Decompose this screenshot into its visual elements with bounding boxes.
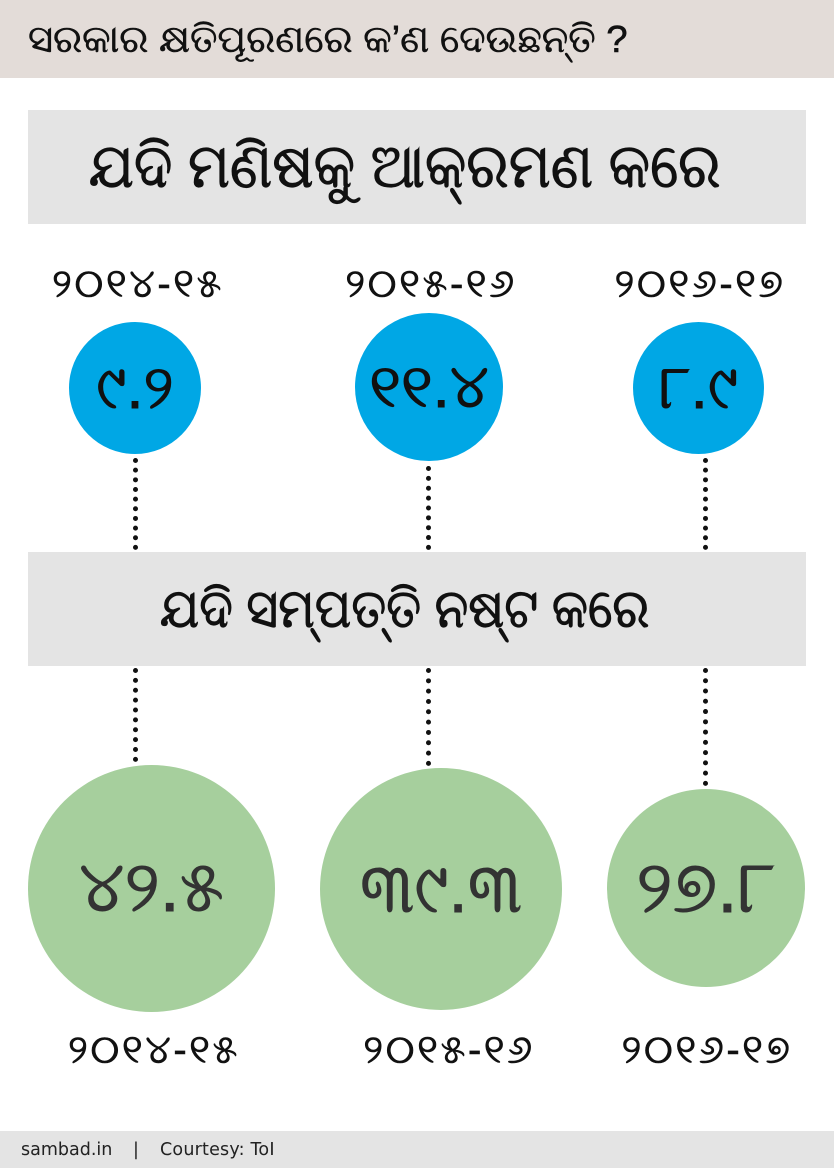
credit line: sambad.in: [21, 1140, 112, 1160]
year label 2014-15 top: ୨୦୧୪-୧୫: [52, 262, 224, 306]
green circle 27.8: [607, 789, 805, 987]
green circle 39.3: ୩୯.୩: [360, 850, 522, 926]
panel heading: if property is damaged: ଯଦି ସମ୍ପତ୍ତି ନଷ୍ଟ କରେ: [160, 579, 650, 639]
credit line: |: [133, 1140, 139, 1160]
green circle 42.5: ୪୨.୫: [79, 848, 224, 927]
year label 2015-16 bottom: ୨୦୧୫-୧୬: [363, 1028, 535, 1072]
footer band: [0, 1131, 834, 1168]
credit line: [21, 1140, 275, 1160]
year label 2016-17 bottom: ୨୦୧୬-୧୭: [622, 1028, 792, 1072]
blue circle 11.4: [355, 313, 503, 461]
blue circle 11.4: ୧୧.୪: [369, 352, 489, 420]
green circle 42.5: [28, 765, 275, 1012]
header band: [0, 0, 834, 78]
blue circle 9.2: ୯.୨: [96, 353, 174, 421]
year label 2016-17 top: ୨୦୧୬-୧୭: [614, 262, 785, 306]
credit line: Courtesy: ToI: [160, 1140, 275, 1160]
blue circle 8.9: ୮.୯: [659, 353, 738, 421]
year label 2014-15 bottom: ୨୦୧୪-୧୫: [68, 1028, 240, 1072]
year label 2015-16 top: ୨୦୧୫-୧୬: [345, 262, 517, 306]
blue circle 9.2: [69, 322, 201, 454]
panel heading: if humans are attacked: [28, 110, 806, 224]
panel heading: if humans are attacked: ଯଦି ମଣିଷକୁ ଆକ୍ରମଣ କରେ: [89, 132, 721, 201]
green circle 39.3: [320, 768, 562, 1010]
panel heading: if property is damaged: [28, 552, 806, 666]
title: ସରକାର କ୍ଷତିପୂରଣରେ କ’ଣ ଦେଉଛନ୍ତି ?: [28, 18, 628, 61]
blue circle 8.9: [633, 322, 764, 454]
green circle 27.8: ୨୭.୮: [636, 846, 776, 928]
